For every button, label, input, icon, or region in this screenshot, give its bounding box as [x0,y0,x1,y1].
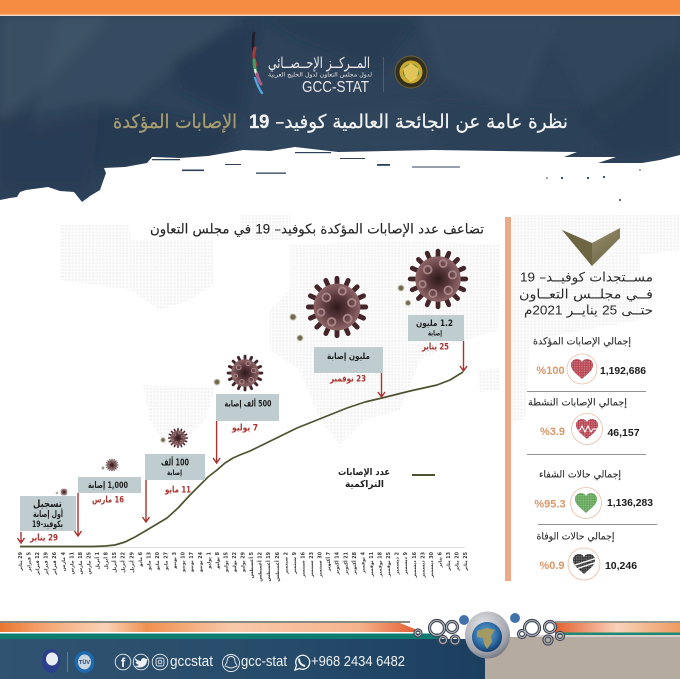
axis date labels: 30 سبتمبر [318,551,324,578]
milestone: 1,000 cases: 16 مارس [92,496,124,506]
stat: active cases: %3.9 [540,426,565,438]
axis date labels: 19 فبراير [44,551,50,576]
axis date labels: 14 أكتوبر [334,551,341,576]
milestone: 100 thousand cases: 11 مايو [164,486,191,496]
axis date labels: 23 سبتمبر [309,552,315,578]
stat: confirmed cases: %100 [536,365,565,377]
milestone: 1.2 million cases: 25 يناير [421,342,449,352]
axis date labels: 18 نوفمبر [378,551,384,577]
virus large 1 [410,251,466,307]
icon: facebook: f [121,655,126,670]
icon: footer logo left [42,649,60,673]
axis date labels: 7 أكتوبر [325,552,332,572]
axis date labels: 23 ديسمبر [420,552,426,579]
chart heading: تضاعف عدد الإصابات المؤكدة بكوفيد– 19 في مجلس التعاون [150,222,484,238]
axis date labels: 25 يناير [463,552,469,572]
logo: centre subtitle Arabic: لدول مجلس التعاون لدول الخليج العربية [268,72,372,78]
axis date labels: 6 مايو [138,551,144,568]
axis date labels: 1 يوليو [206,552,212,570]
panel: side bar [505,217,511,581]
stat: recoveries: %95.3 [534,498,566,510]
panel heading line 1: مســتجدات كوفيــد– 19 [520,270,653,286]
header background [0,14,680,210]
milestone: first case: 29 يناير [29,534,58,544]
text: gcc-stat: gcc-stat [241,654,287,670]
milestone: first case: بكوفيد-19 [32,520,63,530]
globe and chain ornament [415,612,564,658]
axis date labels: 29 يناير [18,551,24,572]
axis date labels: 6 يناير [437,551,443,568]
stat: confirmed cases: 1,192,686 [600,365,646,377]
stat: confirmed cases [533,336,646,384]
axis date labels: 26 فبراير [52,551,58,576]
axis date labels: 1 أبريل [94,552,101,570]
axis date labels: 3 يونيو [172,552,178,570]
logo: GCC-STAT: GCC-STAT [302,79,369,96]
stat: recoveries: 1,136,283 [607,497,653,509]
milestone: 100 thousand cases: 100 ألف [161,456,189,468]
axis date labels: 17 يونيو [189,552,195,573]
virus tiny [106,459,118,471]
title white part: نظرة عامة عن الجائحة العالمية كوفيد– 19 [249,111,568,133]
axis date labels: 19 أغسطس [265,551,272,582]
milestone: 100 thousand cases: إصابة [167,468,182,477]
icon: TUV certification: TÜV [79,659,90,666]
axis date labels: 5 أغسطس [248,552,255,578]
axis date labels: 20 مايو [155,551,161,571]
text: gccstat: gccstat [170,654,213,670]
stat: deaths: إجمالي حالات الوفاة [536,532,615,542]
virus small [169,429,187,447]
axis date labels: 8 يوليو [215,551,221,570]
axis date labels: 16 ديسمبر [412,551,418,579]
stat: recoveries: إجمالي حالات الشفاء [539,470,621,480]
axis line [20,546,465,549]
top orange bar [0,0,680,14]
milestone: one million cases [314,347,385,397]
axis date labels: 4 نوفمبر [360,551,366,574]
icon: twitter [135,658,148,668]
axis date labels: 29 يوليو [241,551,247,573]
milestone: 500 thousand cases [213,394,279,463]
stat: active cases: 46,157 [607,427,640,439]
axis date labels: 30 ديسمبر [429,551,435,579]
axis date labels: 21 أكتوبر [342,552,349,576]
legend [338,467,435,490]
axis date labels: 5 فبراير [27,552,33,573]
axis date labels: 11 نوفمبر [369,552,375,577]
cumulative cases curve [20,372,463,546]
logo separator [382,57,385,92]
milestone: first case: أول إصابة [33,508,63,520]
milestone: 500 thousand cases: 500 ألف إصابة [224,398,272,410]
axis date labels: 2 ديسمبر [395,552,401,575]
axis date labels: 26 أغسطس [274,551,281,582]
axis date labels: 25 نوفمبر [386,552,392,577]
logo: flag ribbon [253,33,262,93]
axis date labels: 24 يونيو [198,551,204,573]
axis date labels: 9 سبتمبر [292,551,298,575]
axis date labels: 12 أغسطس [257,552,264,582]
virus medium [228,356,262,390]
axis date labels: 22 يوليو [232,552,238,573]
milestone: first case [18,496,76,544]
icon: snapchat [222,654,240,672]
title gold part: الإصابات المؤكدة [113,111,237,133]
axis date labels: 25 مارس [86,552,92,575]
milestone: 1.2 million cases: إصابة [428,328,442,338]
icon: gold chevron [562,228,620,266]
stat: recoveries [534,470,653,518]
axis date labels: 9 ديسمبر [403,551,409,575]
axis date labels: 13 يناير [446,552,452,572]
panel heading line 2: فــي مجلــس التعــاون [519,288,653,302]
milestone: 1.2 million cases [408,315,467,371]
footer band [0,621,680,679]
axis date labels: 13 مايو [146,552,152,571]
milestone: one million cases: مليون إصابة [327,352,370,362]
axis date labels: 10 يونيو [181,551,187,573]
axis date labels: 20 يناير [455,551,461,572]
logo: centre name Arabic: المــركــز الإحــصــائي [268,54,370,73]
icon: TUV certification [74,651,94,673]
axis date labels: 29 أبريل [128,551,135,573]
axis date labels: 12 فبراير [35,552,41,576]
stat: active cases: إجمالي الإصابات النشطة [528,398,627,408]
milestone: first case: تسجيل [33,499,62,510]
axis date labels: 11 مارس [69,552,75,575]
world map dots [60,215,680,445]
axis date labels: 8 أبريل [103,551,110,570]
axis date labels: 2 سبتمبر [283,552,289,575]
small virus particles [56,285,410,494]
legend: عدد الإصابات [338,467,390,478]
axis date labels: 28 أكتوبر [351,551,358,576]
icon: GCC emblem [395,56,427,88]
virus smallest [61,489,67,495]
axis date labels: 18 مارس [78,551,84,575]
stat: active cases [528,398,640,444]
white brush edge [0,147,680,211]
axis date labels: 15 أبريل [111,552,118,573]
milestone: 1,000 cases: 1,000 إصابة [88,481,128,491]
milestone: one million cases: 23 نوفمبر [329,374,366,384]
axis date labels: 22 أبريل [120,552,127,573]
axis date labels: 16 سبتمبر [300,551,306,578]
virus large 2 [308,278,366,336]
stat: deaths: 10,246 [605,560,637,572]
icon: whatsapp [295,655,310,670]
axis date labels: 15 يوليو [223,552,229,573]
text: phone number: +968 2434 6482 [311,654,405,670]
stat: deaths [536,532,637,580]
legend: التراكمية [345,479,384,490]
milestone: 500 thousand cases: 7 يوليو [231,424,258,434]
axis date labels: 4 مارس [61,551,67,571]
stat: deaths: %0.9 [539,560,565,572]
panel heading line 3: حتــى 25 ينايــر 2021م [524,302,653,318]
axis date labels [18,551,469,582]
axis date labels: 27 مايو [164,552,170,571]
milestone: 100 thousand cases [142,454,205,522]
milestone: 1.2 million cases: 1.2 مليون [416,319,453,329]
social icons [115,654,168,670]
milestone: 1,000 cases [74,477,141,536]
stat: confirmed cases: إجمالي الإصابات المؤكدة [533,336,631,348]
